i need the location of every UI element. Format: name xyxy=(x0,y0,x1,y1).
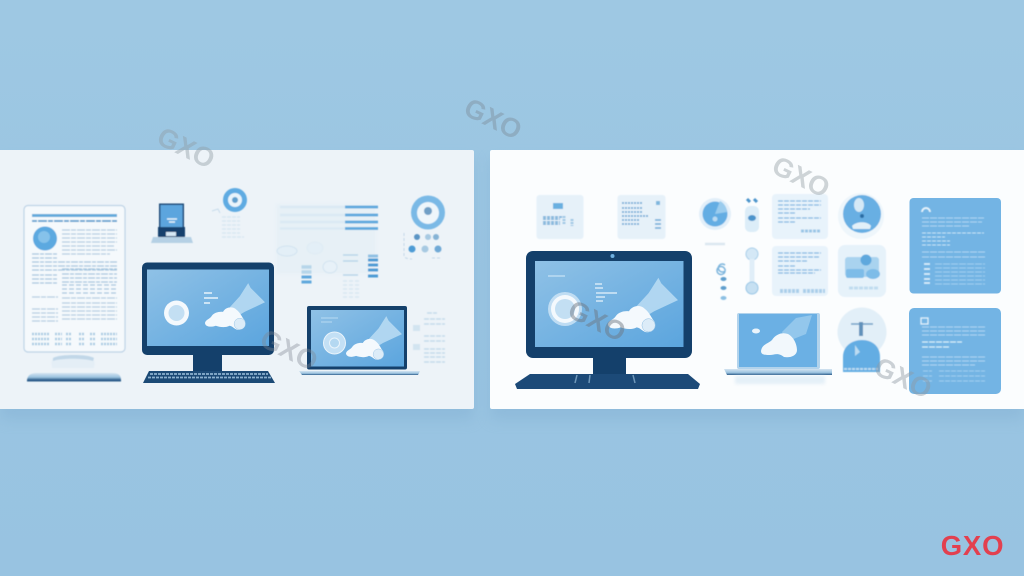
lamp badge xyxy=(838,308,886,372)
faint data chart xyxy=(276,204,378,297)
panel shadows xyxy=(0,158,1024,420)
blue document card lower xyxy=(909,308,1001,394)
watermark: GXO xyxy=(767,150,835,204)
right laptop xyxy=(724,313,832,384)
circle badge xyxy=(838,193,884,239)
text card upper xyxy=(772,194,828,239)
tablet stand xyxy=(27,355,121,382)
blue document card upper xyxy=(910,198,1001,294)
watermark: GXO xyxy=(869,351,937,405)
left monitor xyxy=(142,262,275,383)
panel: left devices xyxy=(0,150,474,409)
small device xyxy=(151,204,193,243)
top card two xyxy=(618,195,666,239)
pie dial icon xyxy=(699,198,731,244)
small circle icon with notes xyxy=(212,188,247,237)
right monitor xyxy=(515,251,700,389)
left laptop xyxy=(299,306,420,375)
small vertical icons xyxy=(717,264,726,300)
ring icon with icon row xyxy=(404,196,445,259)
document tablet xyxy=(24,206,125,352)
watermark: GXO xyxy=(459,92,527,146)
watermark: GXO xyxy=(563,294,631,348)
panel: right devices xyxy=(490,150,1024,409)
bottle icon xyxy=(745,199,759,294)
text card lower xyxy=(772,246,828,296)
top card one xyxy=(536,195,584,239)
left side notes xyxy=(413,313,445,362)
watermark: GXO xyxy=(152,121,220,175)
brand logo: GXO xyxy=(941,530,1004,561)
illustration card xyxy=(838,245,886,297)
watermark: GXO xyxy=(255,323,323,377)
